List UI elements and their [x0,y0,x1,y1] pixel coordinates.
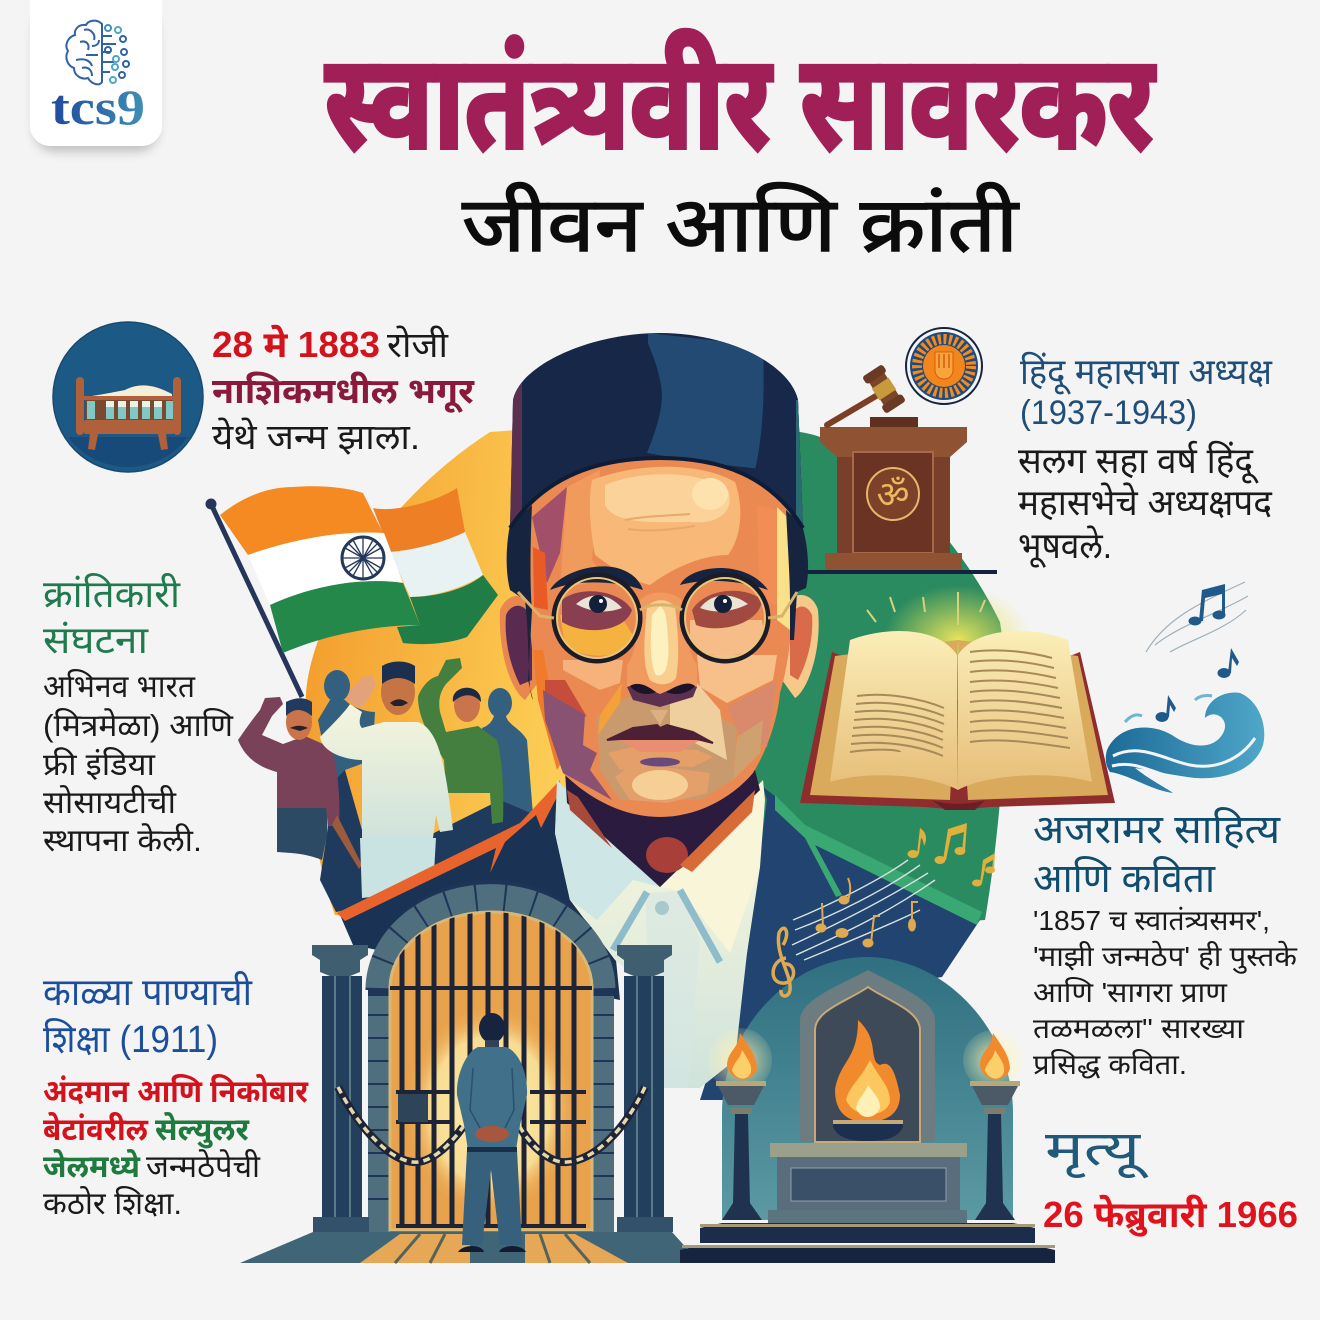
orange coat edge [337,780,560,921]
lips [620,740,700,752]
om emblem: ॐ [877,474,909,515]
ocean wave [1106,692,1264,793]
figure: man in green [418,658,503,824]
left page [830,631,958,790]
illustration: notes and wave [1106,582,1264,793]
right torch [963,1030,1023,1220]
text block: literature and poetry: '1857 च स्वातंत्र्यसमर', [1033,905,1270,936]
illustration: indian flag [206,486,498,697]
text block: birth: रोजी [387,325,449,365]
cap [510,333,803,524]
printed lines [850,650,1070,756]
text block: literature and poetry: आणि 'सागरा प्राण [1033,976,1228,1008]
beamed note [1188,584,1226,626]
icon: brain circuit [66,21,129,84]
prisoner [457,1013,527,1252]
altar [770,1143,967,1157]
lower note [1156,695,1176,722]
glow [883,585,1033,695]
illustration: cellular jail gate [240,880,700,1263]
text block: birth: नाशिकमधील भगूर [212,371,475,413]
text block: revolutionary organisation: संघटना [43,620,149,662]
om emblem [867,468,919,520]
ground [240,1232,700,1263]
teal dome [722,957,1013,1220]
illustration: saluting revolutionaries [238,658,535,912]
philtrum [650,710,668,725]
figure: man in maroon [238,697,362,869]
eyes [576,595,748,611]
text block: revolutionary organisation: अभिनव भारत [43,669,196,704]
mattress slats [86,400,174,420]
rays [867,592,985,625]
logo card [30,0,162,152]
ears [500,595,819,700]
text block: black water sentence: सेल्युलर [155,1112,250,1149]
text block: black water sentence: काळ्या पाण्याची [43,970,253,1014]
centre lower face [597,697,737,800]
small note [1218,648,1239,678]
nose [627,592,697,697]
text block: literature and poetry: 'माझी जन्मठेप' ही पुस्तके [1033,940,1298,974]
neck [565,770,760,887]
crib frame [76,377,181,450]
text block: black water sentence: कठोर शिक्षा. [43,1186,182,1221]
spine base [932,800,985,810]
text block: birth: येथे जन्म झाला. [212,417,420,457]
chains [338,1087,645,1162]
subtitle: जीवन आणि क्रांती [462,183,1019,268]
lit doorway [390,912,592,1230]
silhouette figures [318,670,533,835]
pages stack [810,640,1108,800]
forehead shading [532,487,567,583]
ashoka chakra [342,537,384,579]
hindu mahasabha badge [906,328,982,404]
cap band [510,458,803,528]
illustration: podium and gavel [803,328,997,574]
collar loops and button [613,890,720,962]
text block: literature and poetry: अजरामर साहित्य [1033,807,1281,852]
text block: birth [212,323,475,457]
left torch [708,1028,772,1220]
text block: black water sentence: शिक्षा (1911) [43,1017,218,1061]
text block: black water sentence: जेलमध्ये [43,1149,141,1184]
illustration: memorial with flames [680,957,1055,1263]
text block: death: मृत्यू [1045,1123,1149,1179]
collar right [660,780,765,953]
right page [958,631,1092,790]
text block: death [1043,1123,1298,1237]
collar left [555,780,660,920]
text block: black water sentence [43,970,309,1221]
text block: revolutionary organisation: फ्री इंडिया [43,747,156,782]
illustration: portrait [337,325,982,1100]
background sun disc [305,420,1005,940]
coat green stripe [775,795,982,925]
text block: literature and poetry: तळमळला" सारख्या [1033,1013,1245,1044]
text block: literature and poetry [1033,807,1298,1080]
base line [803,570,997,574]
coat right [700,787,980,1100]
text block: literature and poetry: आणि कविता [1033,856,1216,901]
text block: hindu mahasabha president: सलग सहा वर्ष हिंदू [1018,440,1259,484]
bars [390,900,592,1226]
blanket [86,385,172,400]
flame bowl [833,1122,903,1141]
text block: death: 26 फेब्रुवारी 1966 [1043,1193,1298,1237]
navy backdrop [320,770,372,912]
steps [700,1223,1035,1243]
right pillar [617,945,673,1232]
text block: hindu mahasabha president: हिंदू महासभा अध्यक्ष [1020,351,1273,395]
text block: hindu mahasabha president: भूषवले. [1018,525,1112,568]
text block: revolutionary organisation: क्रांतिकारी [43,572,181,616]
shirt [555,833,760,1088]
cover [800,652,1115,810]
text block: black water sentence: अंदमान आणि निकोबार [43,1074,309,1109]
gavel [827,364,906,425]
under lens cheeks [560,615,636,656]
staff lines [792,860,935,960]
central flame [835,1020,900,1122]
flag pole [211,504,302,697]
crib icon [53,322,203,472]
text block: revolutionary organisation: (मित्रमेळा) आणि [43,708,234,743]
text block: revolutionary organisation: स्थापना केली. [43,823,202,858]
face base [528,445,795,817]
round glasses [518,575,797,661]
arch body [368,880,613,1232]
side stone blocks [368,996,614,1232]
logo wordmark: tcs9 [51,79,145,135]
figure: man in white [320,662,453,898]
lower left cheek [533,650,563,770]
podium [837,457,950,553]
front fold [220,486,384,555]
coat left [340,787,620,1000]
illustration: music notes on coat [773,823,995,996]
arch stones [379,898,602,990]
text block: hindu mahasabha president [1018,351,1273,568]
text block: hindu mahasabha president: महासभेचे अध्यक्षपद [1018,482,1273,523]
back fold [373,488,465,552]
eye sockets [562,591,632,630]
gold notes on green [908,823,995,886]
treble clef [773,928,794,996]
text block: black water sentence: बेटांवरील [43,1112,149,1147]
niche [800,970,935,1142]
text block: revolutionary organisation [43,572,234,858]
eyebrows [550,566,768,590]
gold notes on staff [816,878,918,947]
text block: black water sentence: जन्मठेपेची [146,1149,261,1184]
text block: birth: 28 मे 1883 [212,323,380,365]
text block: literature and poetry: प्रसिद्ध कविता. [1033,1048,1187,1080]
text block: hindu mahasabha president: (1937-1943) [1020,394,1197,432]
text block: revolutionary organisation: सोसायटीची [43,785,177,820]
hair sides [507,505,808,700]
staff swirl [1146,582,1248,652]
illustration: open book [800,585,1115,810]
left pillar [312,945,369,1232]
chin [615,763,710,803]
